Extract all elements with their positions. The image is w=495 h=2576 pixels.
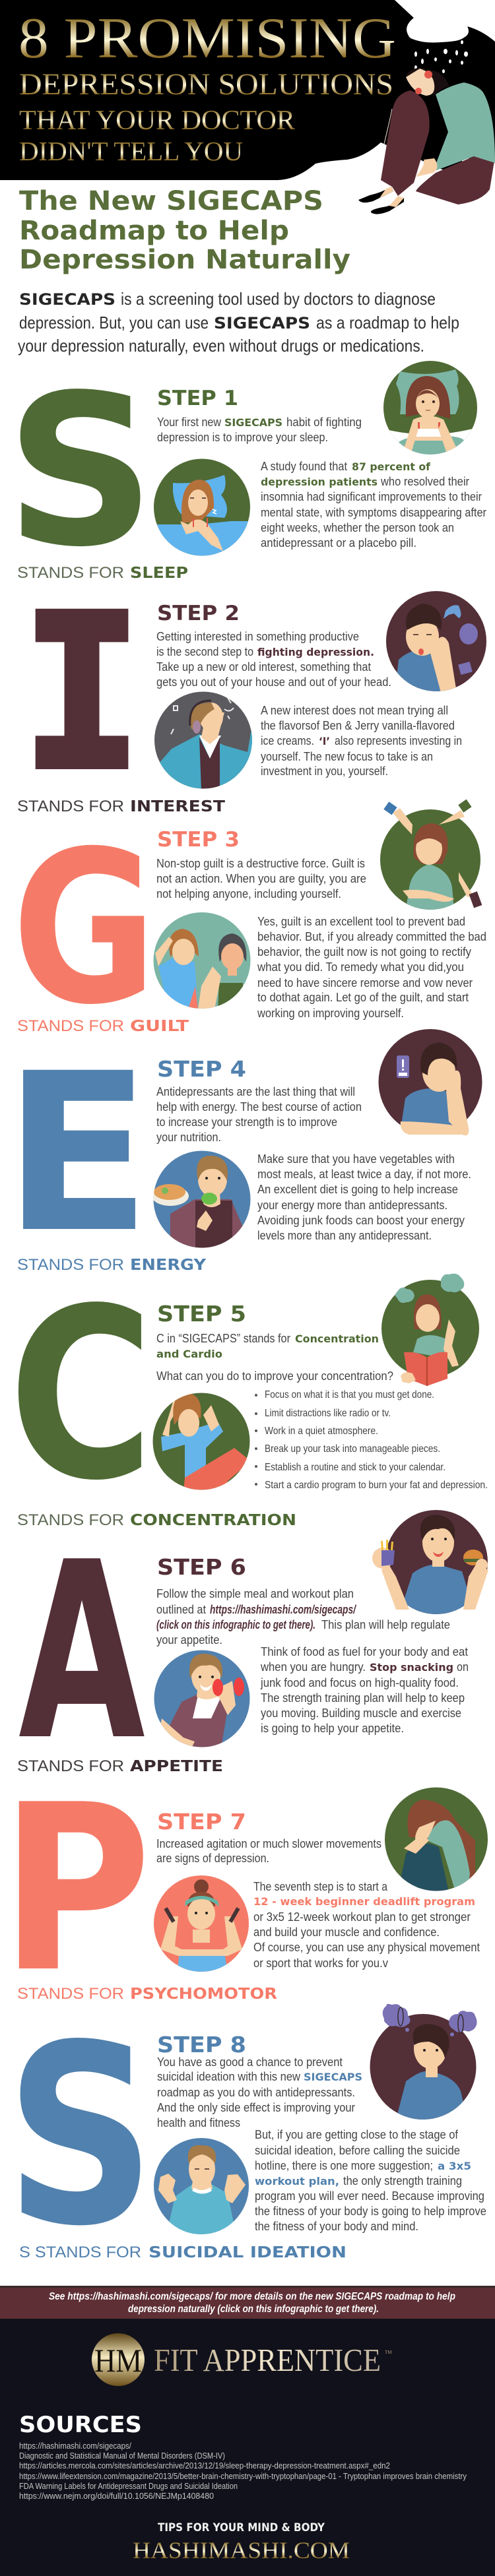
panel: step 3 guilt: [12, 800, 486, 1051]
paragraph: food as fuel: Stop snacking: [370, 1661, 453, 1674]
stands for label: CONCENTRATION: [130, 1512, 296, 1529]
paragraph: guilt tool: Yes, guilt is an excellent tool to prevent bad: [257, 915, 465, 928]
big letter P: P: [0, 1756, 152, 2023]
paragraph: food as fuel: junk food and focus on high-quality food.: [260, 1676, 459, 1689]
list: concentration tips: Work in a quiet atmosphere.: [265, 1426, 378, 1437]
stands for label: PSYCHOMOTOR: [130, 1986, 277, 2003]
paragraph: 3x5 workout plan: [255, 2128, 486, 2233]
text block: step 4 intro: to increase your strength is to improve: [156, 1115, 337, 1129]
list: concentration tips: [255, 1389, 488, 1491]
call to action banner: [0, 2286, 495, 2319]
text block: step 8 intro: health and fitness: [157, 2116, 240, 2129]
paragraph: vegetables: An excellent diet is going to help increase: [257, 1183, 458, 1196]
text block: step 1 intro: SIGECAPS: [224, 416, 282, 429]
text block: step 3 intro: Non-stop guilt is a destructive force. Guilt is: [156, 857, 365, 870]
paragraph: food as fuel: you moving. Building muscle and exercise: [261, 1707, 461, 1720]
paragraph: 3x5 workout plan: hotline, there is one more suggestion;: [255, 2159, 433, 2172]
logo: HM Fit Apprentice: [92, 2333, 392, 2386]
title: [18, 7, 396, 166]
panel: footer: [0, 2286, 495, 2576]
big letter I: I: [22, 571, 142, 816]
paragraph: food as fuel: on: [457, 1660, 469, 1674]
sources heading: SOURCES: [19, 2412, 142, 2438]
text block: step 1 intro: Your first new: [157, 416, 222, 429]
stands for label: SUICIDAL IDEATION: [148, 2244, 346, 2261]
paragraph: step 1 study: depression patients: [261, 476, 378, 488]
step heading: STEP 4: [157, 1056, 246, 1082]
list: concentration tips: Break up your task into manageable pieces.: [265, 1443, 440, 1455]
text block: step 4 intro: [156, 1085, 362, 1144]
text block: step 2 intro: gets you out of your house and out of your head.: [156, 675, 391, 689]
icon: woman lifting dumbbells: [153, 1875, 252, 1974]
text block: step 4 intro: your nutrition.: [156, 1131, 221, 1144]
text block: step 7 intro: Increased agitation or much slower movements: [156, 1837, 381, 1850]
paragraph: 3x5 workout plan: the fitness of your body and mind.: [255, 2220, 418, 2233]
main heading: The New SIGECAPS: [19, 186, 323, 216]
intro text: as a roadmap to help: [316, 313, 459, 332]
text block: step 7 intro: are signs of depression.: [156, 1852, 269, 1865]
paragraph: guilt tool: need to have sincere remorse and vow never: [257, 976, 473, 990]
intro text: SIGECAPS: [214, 314, 310, 332]
sources list: https://www.nejm.org/doi/full/10.1056/NEJMp1408480: [19, 2491, 214, 2501]
paragraph: 3x5 workout plan: suicidal ideation, before calling the suicide: [255, 2144, 460, 2157]
icon: bored man with hobbies: [385, 590, 487, 693]
paragraph: step 1 study: who resolved their: [380, 475, 469, 488]
text block: step 2 intro: Take up a new or old interest, something that: [156, 660, 371, 674]
paragraph: new interest: A new interest does not mean trying all: [261, 704, 448, 717]
text block: step 6 intro: [156, 1587, 450, 1647]
paragraph: new interest: yourself. The new focus to take is an: [261, 750, 433, 763]
panel: step 6 appetite: [17, 1509, 488, 1794]
icon: worried man with dark clouds: [370, 2004, 478, 2120]
text block: step 5 intro: [156, 1332, 393, 1383]
paragraph: food as fuel: [260, 1645, 469, 1735]
stands for label: STANDS FOR: [17, 1017, 124, 1035]
sources list: https://articles.mercola.com/sites/articles/archive/2013/12/19/sleep-therapy-depression-treatment.aspx#_edn2: [19, 2461, 390, 2470]
icon: man with burger and fries: [372, 1509, 488, 1615]
sources list: https://hashimashi.com/sigecaps/: [19, 2441, 131, 2451]
stands for label: STANDS FOR: [17, 1985, 124, 2003]
icon: man eating salad: [152, 1150, 252, 1249]
paragraph: deadlift program: and build your muscle and confidence.: [253, 1926, 440, 1939]
text block: step 8 intro: And the only side effect is improving your: [157, 2101, 355, 2114]
text block: step 8 intro: [157, 2056, 362, 2129]
title: 8 PROMISING: [18, 7, 396, 71]
paragraph: deadlift program: The seventh step is to start a: [253, 1880, 388, 1893]
big letter A: A: [18, 1511, 147, 1794]
paragraph: guilt tool: [257, 915, 486, 1020]
icon: woman awake in bed: [383, 361, 478, 456]
icon: pointed-at guilty woman: [380, 800, 482, 910]
sources list: Diagnostic and Statistical Manual of Mental Disorders (DSM-IV): [19, 2451, 225, 2461]
text block: step 7 intro: [156, 1837, 381, 1865]
paragraph: step 1 study: antidepressant or a placebo pill.: [261, 536, 416, 550]
big letter E: E: [3, 1026, 151, 1280]
text block: step 2 intro: Getting interested in something productive: [156, 630, 359, 643]
icon: woman sleeping: [153, 458, 251, 557]
stands for label: STANDS FOR: [17, 1256, 124, 1274]
text block: step 8 intro: suicidal ideation with this new: [157, 2070, 301, 2083]
paragraph: vegetables: most meals, at least twice a day, if not more.: [257, 1168, 471, 1181]
text block: step 8 intro: You have as good a chance to prevent: [157, 2056, 343, 2069]
paragraph: 3x5 workout plan: But, if you are getting close to the stage of: [255, 2128, 459, 2141]
text block: step 2 intro: fighting depression.: [257, 646, 374, 658]
intro text: [18, 289, 459, 356]
text block: step 4 intro: help with energy. The best course of action: [156, 1100, 362, 1114]
panel: step 4 energy: [3, 1026, 483, 1280]
intro text: your depression naturally, even without drugs or medications.: [18, 336, 424, 356]
paragraph: 3x5 workout plan: a 3x5: [438, 2160, 471, 2172]
panel: header: [0, 0, 495, 214]
step heading: STEP 7: [157, 1809, 246, 1835]
stands for label: STANDS FOR: [17, 1757, 124, 1775]
footer background: [0, 2286, 495, 2576]
stands for label: STANDS FOR: [17, 564, 124, 582]
paragraph: vegetables: [257, 1152, 471, 1242]
paragraph: new interest: the flavorsof Ben & Jerry vanilla-flavored: [261, 719, 455, 732]
paragraph: food as fuel: Think of food as fuel for your body and eat: [261, 1645, 468, 1658]
step heading: STEP 2: [157, 602, 240, 625]
text block: step 6 intro: your appetite.: [156, 1633, 222, 1647]
big letter S: S: [5, 350, 156, 593]
text block: step 4 intro: Antidepressants are the last thing that will: [156, 1085, 355, 1098]
paragraph: new interest: [261, 704, 462, 778]
intro text: is a screening tool used by doctors to diagnose: [121, 289, 436, 309]
panel: step 1 sleep: [5, 350, 486, 593]
paragraph: vegetables: Avoiding junk foods can boost your energy: [257, 1214, 465, 1227]
step heading: STEP 6: [157, 1554, 246, 1580]
big letter G: G: [12, 807, 157, 1051]
paragraph: new interest: ice creams.: [261, 734, 314, 747]
step heading: STEP 1: [157, 387, 238, 410]
paragraph: deadlift program: [253, 1880, 480, 1970]
list: concentration tips: Focus on what it is that you must get done.: [265, 1389, 434, 1400]
list: concentration tips: Limit distractions like radio or tv.: [265, 1408, 391, 1419]
text block: step 8 intro: SIGECAPS: [304, 2071, 362, 2083]
logo: HM Fit Apprentice: FIT APPRENTICE: [154, 2342, 381, 2378]
text block: step 5 intro: What can you do to improve your concentration?: [156, 1369, 393, 1383]
main heading: Roadmap to Help: [19, 216, 289, 246]
paragraph: 3x5 workout plan: workout plan,: [255, 2175, 339, 2187]
paragraph: deadlift program: or 3x5 12-week workout plan to get stronger: [253, 1910, 471, 1924]
icon: man with headphones: [154, 691, 253, 790]
main heading: [19, 186, 350, 275]
panel: step 2 interest: [17, 571, 487, 816]
text block: step 6 intro: outlined at: [156, 1603, 206, 1616]
stands for label: STANDS FOR: [17, 798, 124, 815]
text block: step 1 intro: [157, 416, 362, 444]
icon: rain cloud: [395, 0, 495, 73]
logo: HM Fit Apprentice: TM: [385, 2350, 392, 2355]
paragraph: new interest: also represents investing in: [335, 734, 462, 747]
text block: step 3 intro: [156, 857, 366, 900]
paragraph: guilt tool: behavior, the guilt now is not going to rectify: [257, 945, 471, 958]
step heading: STEP 5: [157, 1301, 246, 1327]
title: THAT YOUR DOCTOR: [19, 106, 295, 136]
icon: woman curled up: [384, 1786, 488, 1892]
text block: step 5 intro: Concentration: [295, 1333, 379, 1345]
sources list: [19, 2441, 467, 2501]
illustration: sad woman hugging knees: [358, 67, 495, 214]
paragraph: guilt tool: working on improving yourself.: [257, 1007, 404, 1020]
paragraph: food as fuel: is going to help your appetite.: [261, 1722, 404, 1735]
paragraph: food as fuel: when you are hungry.: [260, 1660, 366, 1674]
stands for label: APPETITE: [130, 1758, 223, 1775]
text block: step 6 intro: (click on this infographic to get there).: [156, 1618, 315, 1631]
stands for label: INTEREST: [130, 798, 225, 815]
list: concentration tips: Establish a routine and stick to your calendar.: [265, 1462, 446, 1473]
text block: step 6 intro: https://hashimashi.com/sigecaps/: [210, 1603, 357, 1616]
icon: man lifting dumbbell: [153, 1649, 252, 1748]
big letter C: C: [9, 1258, 154, 1532]
stands for label: STANDS FOR: [17, 1511, 124, 1529]
paragraph: food as fuel: The strength training plan will help to keep: [261, 1691, 465, 1705]
stands for label: S STANDS FOR: [19, 2244, 141, 2261]
intro text: depression. But, you can use: [19, 313, 209, 332]
sources list: FDA Warning Labels for Antidepressant Drugs and Suicidal Ideation: [19, 2481, 238, 2491]
paragraph: new interest: investment in you, yourself.: [261, 765, 388, 778]
step heading: STEP 8: [157, 2032, 246, 2058]
paragraph: new interest: ‘I’: [319, 735, 330, 747]
text block: step 2 intro: [156, 630, 391, 689]
website name: HASHIMASHI.COM: [133, 2537, 350, 2563]
paragraph: guilt tool: what you did. To remedy what you did,you: [257, 960, 464, 974]
stands for label: SLEEP: [130, 565, 188, 582]
title: DEPRESSION SOLUTIONS: [19, 67, 393, 102]
paragraph: step 1 study: [261, 460, 486, 550]
text block: step 8 intro: roadmap as you do with antidepressants.: [157, 2086, 355, 2099]
text block: step 5 intro: C in “SIGECAPS” stands for: [156, 1332, 290, 1345]
paragraph: step 1 study: 87 percent of: [352, 460, 431, 473]
step heading: STEP 3: [157, 828, 240, 852]
call to action banner: depression naturally (click on this infographic to get there).: [128, 2304, 379, 2315]
title: DIDN'T TELL YOU: [19, 136, 243, 166]
icon: two worried women: [153, 912, 252, 1011]
paragraph: step 1 study: A study found that: [261, 460, 347, 473]
icon: woman distracted reading: [380, 1274, 480, 1386]
text block: step 5 intro: and Cardio: [156, 1348, 222, 1360]
paragraph: 3x5 workout plan: the only strength training: [343, 2174, 462, 2187]
logo: HM Fit Apprentice: HM: [94, 2342, 142, 2379]
paragraph: deadlift program: or sport that works for you.v: [253, 1957, 388, 1970]
tagline: TIPS FOR YOUR MIND & BODY: [158, 2521, 325, 2534]
paragraph: vegetables: Make sure that you have vegetables with: [257, 1152, 455, 1166]
icon: tired man with low battery: [378, 1028, 483, 1135]
big letter S: S: [5, 1992, 155, 2280]
icon: man meditating: [153, 2137, 249, 2235]
paragraph: vegetables: your energy more than antidepressants.: [257, 1199, 447, 1212]
paragraph: step 1 study: eight weeks, whether the person took an: [261, 521, 454, 534]
text block: step 1 intro: depression is to improve your sleep.: [157, 431, 328, 444]
text block: step 2 intro: is the second step to: [156, 645, 253, 658]
panel: step 5 concentration: [9, 1258, 488, 1532]
text block: step 6 intro: This plan will help regulate: [321, 1618, 450, 1631]
main heading: Depression Naturally: [19, 245, 350, 275]
text block: step 1 intro: habit of fighting: [286, 416, 362, 429]
text block: step 6 intro: Follow the simple meal and workout plan: [156, 1587, 354, 1600]
stands for label: ENERGY: [130, 1257, 206, 1274]
header black background: [0, 0, 495, 180]
paragraph: deadlift program: 12 - week beginner deadlift program: [253, 1895, 475, 1908]
icon: woman hands behind head: [152, 1392, 251, 1492]
text block: step 3 intro: not an action. When you are guilty, you are: [156, 872, 366, 885]
intro text: SIGECAPS: [19, 290, 116, 309]
panel: step 7 psychomotor: [0, 1756, 488, 2023]
paragraph: guilt tool: to dothat again. Let go of the guilt, and start: [257, 991, 469, 1004]
stands for label: GUILT: [130, 1018, 189, 1035]
paragraph: vegetables: levels more than any antidepressant.: [257, 1229, 432, 1242]
text block: step 3 intro: not helping anyone, including yourself.: [156, 887, 341, 900]
panel: step 8 suicidal ideation: [20, 2004, 486, 2257]
